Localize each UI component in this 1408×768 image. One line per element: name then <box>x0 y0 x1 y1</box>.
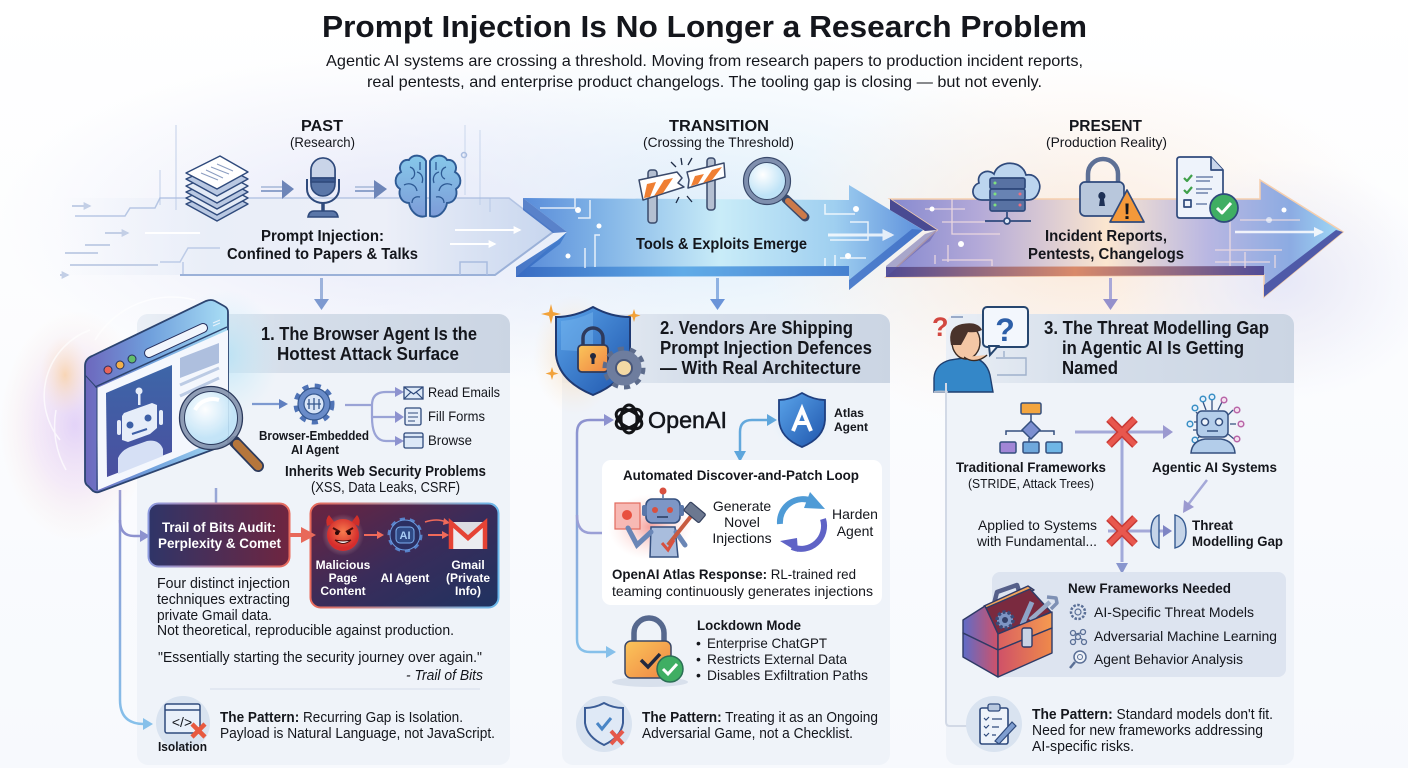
panel 1 heading: Hottest Attack Surface <box>277 343 459 364</box>
panel 2 connector lines <box>577 414 616 658</box>
frameworks label: (STRIDE, Attack Trees) <box>968 476 1094 491</box>
attack chain labels <box>316 558 490 598</box>
branch arrows: agent capabilities <box>345 387 404 446</box>
panel 1 background <box>137 314 510 765</box>
panel 3 header band <box>946 314 1294 383</box>
icon: red cross 2 <box>1109 518 1135 544</box>
icon: red-team robot <box>608 488 706 560</box>
icon: thinking person: ? <box>932 312 948 342</box>
card heading: Automated Discover-and-Patch Loop <box>623 468 859 483</box>
icon: microphone <box>307 158 339 217</box>
subtitle: Agentic AI systems are crossing a threshold. Moving from research papers to production incident reports, <box>326 53 1083 70</box>
card response text: OpenAI Atlas Response: RL-trained red <box>612 566 856 582</box>
agentic label: Agentic AI Systems <box>1152 459 1277 475</box>
inherits text: (XSS, Data Leaks, CSRF) <box>311 480 460 496</box>
panel 3 pattern text: The Pattern: Standard models don't fit. <box>1032 707 1273 723</box>
browser illustration <box>0 290 280 540</box>
panel 1 pattern text <box>220 710 495 742</box>
arrow: audit to attack chain <box>290 533 304 537</box>
arrow: browser to agent <box>252 399 288 409</box>
icon: isolation: </> <box>172 714 192 730</box>
applied text: Applied to Systems <box>978 517 1097 533</box>
lockdown text: • <box>696 635 701 651</box>
present caption: Incident Reports, <box>1045 228 1167 245</box>
attack chain labels: Info) <box>455 584 481 598</box>
framework item 3: Agent Behavior Analysis <box>1094 651 1243 667</box>
arrow: past down to panel 1 <box>314 278 329 310</box>
audit finding text: private Gmail data. <box>157 608 272 624</box>
Atlas label <box>834 406 868 434</box>
arrows: broken paths <box>1075 425 1207 574</box>
panel 2 heading: — With Real Architecture <box>660 357 861 378</box>
arrow: loop to Atlas <box>734 414 777 462</box>
icon: isolation: Isolation <box>158 740 207 754</box>
panel 3 side connector <box>946 383 967 726</box>
new frameworks box <box>963 572 1286 677</box>
panel 3 heading: in Agentic AI Is Getting <box>1062 337 1244 358</box>
audit finding text: Four distinct injection <box>157 576 290 592</box>
new frameworks heading: New Frameworks Needed <box>1068 580 1231 596</box>
past label: PAST <box>301 118 343 135</box>
arrow: transition down to panel 2 <box>710 278 725 310</box>
lockdown text: Restricts External Data <box>707 651 847 667</box>
card response text: teaming continuously generates injections <box>612 583 873 599</box>
panel 3 pattern text: AI-specific risks. <box>1032 739 1134 755</box>
framework item 1: AI-Specific Threat Models <box>1094 604 1254 620</box>
panel 1: browser agent <box>0 290 510 765</box>
agent label: AI Agent <box>291 443 340 457</box>
arrow: agent to gmail <box>425 518 450 539</box>
loop text: generate: Injections <box>712 530 772 546</box>
past arrow body <box>60 198 553 275</box>
panel 1 heading <box>261 323 477 364</box>
capability: fill forms: Fill Forms <box>428 408 485 424</box>
frameworks label: Traditional Frameworks <box>956 459 1106 475</box>
icon: cycle arrows <box>780 492 825 552</box>
icon: lockdown padlock <box>612 618 688 687</box>
panel 3 pattern text: Need for new frameworks addressing <box>1032 723 1263 739</box>
panel 1 pattern text: The Pattern: Recurring Gap is Isolation. <box>220 710 463 726</box>
panel 2 heading: Prompt Injection Defences <box>660 337 872 358</box>
applied text <box>976 517 1097 549</box>
loop text: harden: Agent <box>837 523 873 539</box>
panel 1 pattern text: Payload is Natural Language, not JavaScript. <box>220 726 495 742</box>
transition sublabel: (Crossing the Threshold) <box>643 134 794 150</box>
browser address bar <box>149 328 203 353</box>
icon: OpenAI logo <box>613 405 645 433</box>
icon: checklist document <box>1177 157 1238 222</box>
icon: padlock with warning <box>1080 159 1144 224</box>
audit box <box>148 504 290 566</box>
lockdown text: Disables Exfiltration Paths <box>707 667 868 683</box>
icon: AI gear: AI <box>400 530 410 542</box>
arrow: mic to brain <box>355 180 387 199</box>
timeline banner: past <box>60 118 553 275</box>
panel 1 connector lines <box>120 488 216 730</box>
title: Prompt Injection Is No Longer a Research Problem <box>322 9 1087 44</box>
past caption: Confined to Papers & Talks <box>227 246 418 263</box>
panel 2 pattern text: The Pattern: Treating it as an Ongoing <box>642 710 878 726</box>
gap label: Modelling Gap <box>1192 533 1283 549</box>
icon: pattern clipboard <box>966 696 1022 752</box>
audit finding text <box>157 576 454 639</box>
past caption: Prompt Injection: <box>261 228 384 245</box>
audit box: Perplexity & Comet <box>158 536 281 551</box>
icon: cloud server <box>973 163 1040 224</box>
lockdown text <box>696 618 868 683</box>
arrow: papers to mic <box>261 180 294 199</box>
panel 1 header band <box>137 314 510 373</box>
loop text: generate: Generate <box>713 498 771 514</box>
icon: brain <box>396 156 460 217</box>
OpenAI wordmark: OpenAI <box>648 407 727 433</box>
agent label <box>259 429 369 457</box>
robot in browser <box>117 388 163 474</box>
audit finding text: techniques extracting <box>157 592 290 608</box>
panel 2 background <box>562 314 890 765</box>
capability: browse: Browse <box>428 432 472 448</box>
loop text: harden <box>832 506 878 539</box>
quote: "Essentially starting the security journey over again." <box>158 650 482 666</box>
present arrow body <box>886 180 1343 297</box>
present sublabel: (Production Reality) <box>1046 134 1167 150</box>
icon: transition magnifier <box>744 158 805 217</box>
gap label <box>1192 517 1283 549</box>
panel 3: threat modelling gap <box>932 307 1294 765</box>
panel 2 header band <box>562 314 890 383</box>
icon: thinking person <box>932 307 1028 392</box>
frameworks label <box>956 459 1106 491</box>
attack chain labels: Content <box>320 584 366 598</box>
icon: thinking person: ? <box>995 312 1015 348</box>
icon: flowchart <box>1000 403 1062 453</box>
icon: pattern shield <box>576 696 632 752</box>
attack chain labels: (Private <box>446 571 490 585</box>
subtitle <box>326 53 1083 91</box>
capability: browse <box>404 432 472 448</box>
lockdown text: • <box>696 667 701 683</box>
card response text <box>612 566 873 599</box>
icon: broken barrier <box>639 158 725 223</box>
framework item 2: Adversarial Machine Learning <box>1094 628 1277 644</box>
panel 3 heading: 3. The Threat Modelling Gap <box>1044 317 1269 338</box>
inherits text <box>285 464 486 496</box>
audit finding text: Not theoretical, reproducible against production. <box>157 623 454 639</box>
applied text: with Fundamental... <box>976 533 1097 549</box>
quote: - Trail of Bits <box>406 668 483 684</box>
present caption: Pentests, Changelogs <box>1028 246 1184 263</box>
Atlas label: Agent <box>834 420 868 434</box>
icon: devil <box>322 514 364 556</box>
icon: isolation <box>156 696 210 754</box>
timeline banner: present <box>886 118 1343 297</box>
past caption <box>227 228 418 263</box>
present caption <box>1028 228 1184 263</box>
icon: AI agent gear <box>296 386 332 422</box>
capability: read emails: Read Emails <box>428 384 500 400</box>
panel 1 heading: 1. The Browser Agent Is the <box>261 323 477 344</box>
icon: gmail <box>450 522 486 549</box>
discover-and-patch card <box>602 460 882 605</box>
present label: PRESENT <box>1069 118 1142 135</box>
panel 2 heading: 2. Vendors Are Shipping <box>660 317 853 338</box>
arrow: present down to panel 3 <box>1103 278 1118 310</box>
loop text: harden: Harden <box>832 506 878 522</box>
panel 2 heading <box>660 317 872 378</box>
lockdown text: Lockdown Mode <box>697 618 801 633</box>
panel 3 background <box>946 314 1294 765</box>
panel 2 pattern text: Adversarial Game, not a Checklist. <box>642 726 853 742</box>
icon: red cross 1 <box>1109 419 1135 445</box>
browser dots <box>104 355 136 374</box>
panel 2: vendors <box>533 295 890 765</box>
icon: padlock with warning: ! <box>1123 199 1131 224</box>
quote <box>158 650 483 684</box>
lockdown text: Enterprise ChatGPT <box>707 635 827 651</box>
loop text: generate <box>712 498 772 546</box>
icon: Atlas shield <box>770 386 834 450</box>
attack chain labels: Malicious <box>316 558 371 572</box>
transition label: TRANSITION <box>669 118 769 135</box>
panel 3 heading <box>1044 317 1269 378</box>
past sublabel: (Research) <box>290 134 355 150</box>
icon: agentic robot <box>1187 394 1244 453</box>
icon: shield with lock and gear <box>533 295 643 415</box>
icon: paper stack <box>186 156 248 221</box>
attack chain labels: Page <box>329 571 358 585</box>
gap label: Threat <box>1192 517 1233 533</box>
capability: read emails <box>404 384 500 400</box>
agent label: Browser-Embedded <box>259 429 369 443</box>
timeline banner: transition <box>516 118 923 290</box>
audit box: Trail of Bits Audit: <box>162 520 276 535</box>
icon: gap brackets <box>1151 515 1186 548</box>
panel 3 pattern text <box>1032 707 1273 755</box>
inherits text: Inherits Web Security Problems <box>285 464 486 480</box>
attack chain labels: AI Agent <box>381 571 429 585</box>
arrow: devil to agent <box>364 531 384 539</box>
attack chain box <box>301 504 498 608</box>
icon: toolbox <box>963 585 1057 677</box>
icon: AI gear <box>390 520 420 550</box>
attack chain labels: Gmail <box>451 558 485 572</box>
loop text: generate: Novel <box>724 514 760 530</box>
browser magnifier <box>180 386 258 466</box>
lockdown text: • <box>696 651 701 667</box>
Atlas label: Atlas <box>834 406 864 420</box>
subtitle: real pentests, and enterprise product changelogs. The tooling gap is closing — but not evenly. <box>367 74 1042 91</box>
transition caption: Tools & Exploits Emerge <box>636 236 807 253</box>
transition arrow body <box>516 185 923 290</box>
panel 2 pattern text <box>642 710 878 742</box>
panel 3 heading: Named <box>1062 357 1118 378</box>
capability: fill forms <box>405 408 485 425</box>
